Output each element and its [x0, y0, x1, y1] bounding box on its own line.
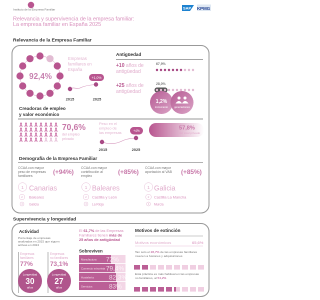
- block: actividad: 30: [26, 277, 35, 286]
- stat: +10 años: antigüedad: [116, 69, 141, 75]
- block: motivos de extinción: Tan solo el 28,7% de las empresas familiares: [135, 250, 198, 254]
- column: contribución al empleo: 3: [85, 203, 87, 206]
- stat: +10 años: +10 años de: [116, 63, 144, 69]
- heading: creadoras de empleo: y valor económico: [19, 112, 60, 117]
- line chart: peso en el empleo: [99, 127, 143, 152]
- panel: relevancia: [12, 46, 209, 213]
- chart: sobreviven: Comercio minorista: [81, 266, 106, 270]
- stat: +10 años: 67,9%: [156, 62, 166, 66]
- logo: SAP: [182, 5, 194, 11]
- block: actividad: 27: [55, 277, 64, 286]
- column: aportación al VAB: aportación al VAB: [145, 170, 173, 174]
- column: peso de empresas: Galicia: [29, 202, 39, 206]
- block: actividad: [18, 229, 71, 293]
- heading: creadoras de empleo: Creadoras de empleo: [19, 106, 66, 111]
- heading: demografía: Demografía de la Empresa Familiar: [19, 156, 97, 161]
- column: peso de empresas: familiares: [18, 174, 33, 178]
- circle: 1,2%: [150, 91, 173, 114]
- heading: antigüedad: Antigüedad: [116, 52, 141, 57]
- column: contribución al empleo: Baleares: [92, 186, 120, 192]
- stat: 70,6%: del empleo: [62, 132, 80, 136]
- ring chart: 92,4%: 92,4%: [29, 72, 52, 81]
- column: aportación al VAB: [144, 166, 202, 206]
- label: empresas familiares en España: [68, 56, 92, 72]
- label: empresas familiares en España: Empresas: [68, 56, 87, 61]
- block: actividad: años: [27, 286, 34, 290]
- label: peso en el empleo: las empresas: [99, 131, 122, 135]
- line chart: empresas familiares 2015-2025: 2015: [66, 98, 74, 102]
- column: aportación al VAB: CCAA con mayor: [145, 166, 172, 170]
- heading: relevancia: Relevancia de la Empresa Familiar: [13, 38, 92, 44]
- logo: Empresa Familiar: [13, 2, 55, 11]
- text: 61,7%: [79, 229, 124, 242]
- column: peso de empresas: peso de empresas: [18, 170, 46, 174]
- stat: 57,8% pill: [149, 123, 204, 137]
- line chart: peso en el empleo: 2025: [132, 148, 140, 152]
- line chart: peso en el empleo: 2015: [99, 148, 107, 152]
- chart: sobreviven: 83%: [109, 284, 122, 290]
- column: contribución al empleo: Castilla y León: [92, 196, 117, 200]
- stat: +25 años: [116, 82, 194, 95]
- block: motivos de extinción: no familiares, al 54,2%: [135, 276, 167, 280]
- heading: supervivencia: Supervivencia y longevidad: [13, 216, 76, 222]
- block: motivos de extinción: 65,6%: [192, 240, 204, 245]
- column: peso de empresas: 3: [21, 203, 23, 206]
- column: contribución al empleo: 1: [85, 185, 88, 190]
- line chart: empresas familiares 2015-2025: +1,0%: [92, 76, 101, 80]
- block: motivos de extinción: Motivos económicos: [135, 240, 171, 245]
- stat: +10 años: [116, 62, 194, 75]
- text: 61,7%: El 61,7% de las Empresas: [79, 229, 124, 233]
- text: 61,7%: 25 años de antigüedad: [79, 238, 121, 242]
- heading: creadoras de empleo: [19, 106, 66, 117]
- block: actividad: años: [56, 286, 63, 290]
- block: actividad: analizadas en 2015 que siguen: [18, 240, 60, 244]
- block: motivos de extinción: [134, 228, 204, 292]
- column: aportación al VAB: 2: [148, 195, 150, 199]
- block: motivos de extinción: Motivos de extinción: [135, 228, 181, 233]
- column: contribución al empleo: contribución al: [81, 170, 103, 174]
- column: aportación al VAB: Castilla La Mancha: [154, 196, 187, 200]
- logo: SAP: SAP: [183, 6, 192, 10]
- divider: [18, 118, 203, 120]
- title: Relevancia y supervivencia de la empresa familiar:: [13, 16, 134, 22]
- stat: +25 años: antigüedad: [116, 89, 141, 95]
- column: peso de empresas: 2: [21, 195, 23, 199]
- label: empresas familiares en España: familiares en: [68, 62, 92, 66]
- block: actividad: 73,1%: [50, 261, 68, 268]
- column: contribución al empleo: (+85%): [118, 169, 139, 176]
- column: contribución al empleo: empleo: [81, 174, 92, 178]
- circle: 1,2%: incremento: [155, 105, 168, 109]
- column: aportación al VAB: Murcia: [154, 202, 164, 206]
- chart: sobreviven: 82,3%: [109, 274, 127, 282]
- chart: sobreviven: Sobreviven: [79, 248, 103, 254]
- chart: sobreviven: Manufactura: [81, 258, 97, 262]
- block: actividad: Porcentaje de empresas: [18, 236, 51, 240]
- title: [13, 16, 134, 28]
- logo: Empresa Familiar: Instituto de la Empresa Familiar: [13, 8, 55, 12]
- column: aportación al VAB: 3: [148, 203, 150, 206]
- line chart: empresas familiares 2015-2025: 2025: [93, 98, 101, 102]
- panel: supervivencia: [12, 224, 209, 296]
- pictogram: 70,6% people: [19, 122, 58, 142]
- ring chart: 92,4%: [16, 52, 64, 100]
- column: peso de empresas: Baleares: [29, 196, 44, 200]
- stat: 70,6%: 70,6%: [62, 122, 86, 132]
- stat: +25 años: +25 años de: [116, 83, 144, 89]
- text: 61,7%: Familiares tienen más de: [79, 234, 122, 238]
- column: contribución al empleo: CCAA con mayor: [81, 166, 108, 170]
- circle: people: [170, 91, 194, 114]
- logo: KPMG: KPMG: [197, 6, 211, 11]
- column: peso de empresas: CCAA con mayor: [18, 166, 45, 170]
- label: peso en el empleo: empleo de: [99, 126, 117, 130]
- chart: sobreviven: 79,4%: [106, 266, 124, 272]
- block: actividad: 77%: [20, 261, 33, 268]
- column: peso de empresas: 1: [21, 185, 24, 190]
- column: aportación al VAB: (+85%): [181, 169, 202, 176]
- column: aportación al VAB: Galicia: [154, 186, 176, 192]
- chart: sobreviven: Servicios: [81, 284, 93, 288]
- chart: sobreviven: Hostelería: [81, 276, 94, 280]
- block: actividad: familiares: [20, 256, 34, 260]
- column: contribución al empleo: 2: [85, 195, 87, 199]
- block: motivos de extinción: mueren a fusiones y adquisiciones: [135, 254, 183, 258]
- circle: people: generaciones: [174, 105, 190, 109]
- column: aportación al VAB: 1: [147, 185, 150, 190]
- stat: +25 años: 28,0%: [156, 82, 166, 86]
- block: actividad: Actividad: [19, 229, 39, 234]
- label: peso en el empleo: [99, 122, 122, 135]
- block: motivos de extinción: Esta práctica es más habitual en las empresas: [135, 272, 199, 276]
- block: actividad: activas en 2024: [18, 243, 39, 247]
- column: peso de empresas: (+94%): [53, 169, 74, 176]
- block: actividad: Empresas: [50, 252, 65, 256]
- label: peso en el empleo: Peso en el: [99, 122, 117, 126]
- stat: 57,8% pill: del total privado: [179, 131, 201, 135]
- stat: 57,8% pill: 57,8%: [179, 126, 195, 132]
- block: actividad: Longevidad: [23, 272, 38, 276]
- chart: sobreviven: 72%: [106, 256, 119, 264]
- stat: 70,6%: [62, 122, 86, 141]
- column: contribución al empleo: [81, 166, 139, 206]
- heading: antigüedad: [116, 52, 203, 60]
- column: peso de empresas: [18, 166, 74, 206]
- circle: 1,2%: 1,2%: [156, 99, 168, 105]
- chart: sobreviven: [79, 248, 127, 290]
- title: La empresa familiar en España 2025: [13, 22, 101, 28]
- line chart: empresas familiares 2015-2025: [66, 74, 104, 102]
- block: actividad: no familiares: [50, 256, 68, 260]
- column: peso de empresas: Canarias: [29, 186, 58, 192]
- line chart: peso en el empleo: +4%: [133, 129, 140, 133]
- stat: 70,6%: privado: [62, 137, 74, 141]
- column: contribución al empleo: La Rioja: [92, 202, 104, 206]
- block: actividad: Longevidad: [52, 272, 67, 276]
- label: empresas familiares en España: España: [68, 67, 83, 72]
- block: actividad: Empresas: [20, 252, 35, 256]
